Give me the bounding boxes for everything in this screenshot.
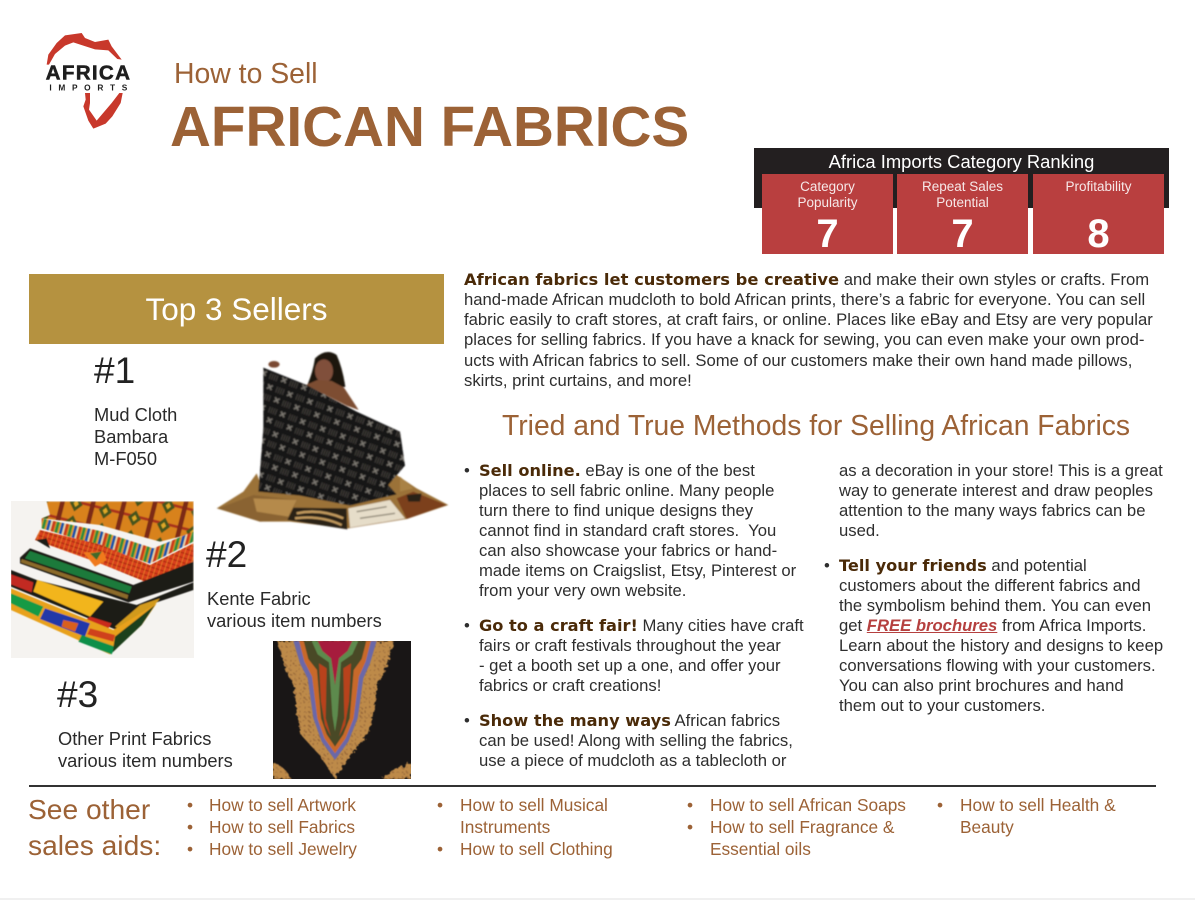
intro paragraph: skirts, print curtains, and more!	[464, 371, 692, 390]
photo: stacked kente fabrics	[11, 501, 194, 658]
tip: tell your friends: Tell your friends and potential	[839, 556, 1087, 575]
link list: column 4	[937, 795, 1116, 837]
rank number 1: #1	[94, 350, 135, 391]
tip: sell online	[464, 461, 796, 600]
link list: column 2: •	[437, 795, 443, 815]
tip: tell your friends: •	[824, 556, 830, 575]
tip continued: decoration: attention to the many ways fabrics can be	[839, 501, 1145, 520]
card: profitability: 8	[1087, 212, 1110, 256]
tip: show the many ways: Show the many ways African fabrics	[479, 711, 780, 730]
tip continued: decoration: used.	[839, 521, 880, 540]
link list: column 2: How to sell Musical	[460, 795, 608, 815]
tip: show the many ways: can be used! Along with selling the fabrics,	[479, 731, 793, 750]
link list: column 3: How to sell Fragrance &	[710, 817, 894, 837]
seller 2 text	[206, 534, 382, 631]
tip: sell online: turn there to find unique designs they	[479, 501, 753, 520]
tip: go to a craft fair: fairs or craft festivals throughout the year	[479, 636, 781, 655]
logo: Africa Imports: AFRICA	[46, 62, 130, 85]
intro paragraph: African fabrics let customers be creative and make their own styles or crafts. From	[464, 270, 1149, 289]
intro paragraph	[464, 270, 1153, 390]
tip: tell your friends: the symbolism behind them. You can even	[839, 596, 1151, 615]
tip continued: decoration: way to generate interest and draw peoples	[839, 481, 1153, 500]
tip: go to a craft fair	[464, 616, 804, 695]
link list: column 2: Instruments	[460, 817, 550, 837]
link list: column 4: Beauty	[960, 817, 1014, 837]
tip: show the many ways	[464, 711, 793, 770]
tip: go to a craft fair: fabrics or craft creations!	[479, 676, 661, 695]
seller 1 details: M-F050	[94, 448, 157, 469]
ranking header band: Africa Imports Category Ranking	[829, 151, 1094, 172]
seller 1 text	[94, 350, 177, 469]
tip: sell online: •	[464, 461, 470, 480]
tip: tell your friends	[824, 556, 1163, 715]
seller 2 details: various item numbers	[207, 610, 382, 631]
link list: column 1: •	[187, 817, 193, 837]
logo: Africa Imports: IMPORTS	[49, 83, 128, 93]
title: African Fabrics: AFRICAN FABRICS	[170, 96, 689, 159]
tip continued: decoration	[839, 461, 1163, 540]
tip: tell your friends: Learn about the history and designs to keep	[839, 636, 1163, 655]
seller 1 details: Mud Cloth	[94, 404, 177, 425]
tip: go to a craft fair: Go to a craft fair! Many cities have craft	[479, 616, 804, 635]
link list: column 1: •	[187, 795, 193, 815]
heading: top 3 sellers	[29, 274, 444, 344]
heading: see other sales aids: sales aids:	[28, 829, 161, 861]
seller 3 details: Other Print Fabrics	[58, 728, 211, 749]
card: category popularity	[762, 174, 893, 254]
tip: sell online: can also showcase your fabrics or hand-	[479, 541, 777, 560]
heading: see other sales aids: See other	[28, 793, 150, 825]
card: category popularity: Category	[800, 179, 855, 194]
link list: column 1: •	[187, 839, 193, 859]
intro paragraph: ucts with African fabrics to sell. Some of our customers make their own hand made pillows,	[464, 351, 1132, 370]
link list: column 3: How to sell African Soaps	[710, 795, 906, 815]
link list: column 4: How to sell Health &	[960, 795, 1116, 815]
tip: go to a craft fair: - get a booth set up a one, and offer your	[479, 656, 781, 675]
link list: column 2: How to sell Clothing	[460, 839, 613, 859]
tip: sell online: places to sell fabric online. Many people	[479, 481, 774, 500]
intro paragraph: places for selling fabrics. If you have a knack for sewing, you can even make your own prod-	[464, 330, 1144, 349]
tip continued: decoration: as a decoration in your store! This is a great	[839, 461, 1163, 480]
seller 1 details	[94, 404, 177, 469]
card: repeat sales potential: Repeat Sales	[922, 179, 1003, 194]
ranking header band	[754, 148, 1169, 208]
link list: column 3	[687, 795, 906, 859]
heading: top 3 sellers: Top 3 Sellers	[145, 291, 328, 327]
link list: column 1: How to sell Fabrics	[209, 817, 355, 837]
link list: column 3: •	[687, 817, 693, 837]
link list: column 1	[187, 795, 357, 859]
tip: show the many ways: use a piece of mudcloth as a tablecloth or	[479, 751, 786, 770]
tip: sell online: from your very own website.	[479, 581, 686, 600]
heading: see other sales aids	[28, 793, 161, 861]
rank number 3: #3	[57, 674, 98, 715]
text column: selling methods right	[824, 461, 1163, 715]
tip: tell your friends: get FREE brochures from Africa Imports.	[839, 616, 1146, 635]
intro paragraph: fabric easily to craft stores, at craft fairs, or online. Places like eBay and Etsy are very popular	[464, 310, 1153, 329]
seller 3 text	[57, 674, 233, 771]
tip: go to a craft fair: •	[464, 616, 470, 635]
seller 2 details	[207, 588, 382, 631]
link list: column 4: •	[937, 795, 943, 815]
card: category popularity: Popularity	[797, 195, 858, 210]
card: repeat sales potential: 7	[951, 212, 974, 256]
seller 3 details	[58, 728, 233, 771]
link list: column 1: How to sell Artwork	[209, 795, 356, 815]
card: category popularity: 7	[816, 212, 839, 256]
tip: show the many ways: •	[464, 711, 470, 730]
photo: woman holding mud cloth	[216, 350, 449, 530]
card: profitability: Profitability	[1065, 179, 1132, 194]
link list: column 2: •	[437, 839, 443, 859]
link list: column 1: How to sell Jewelry	[209, 839, 357, 859]
seller 3 details: various item numbers	[58, 750, 233, 771]
subtitle: How to Sell: How to Sell	[174, 58, 318, 90]
tip: tell your friends: customers about the different fabrics and	[839, 576, 1141, 595]
card: repeat sales potential	[897, 174, 1028, 254]
link list: column 3: •	[687, 795, 693, 815]
link list: column 3: Essential oils	[710, 839, 811, 859]
logo: Africa Imports	[46, 33, 130, 129]
tip: tell your friends: them out to your customers.	[839, 696, 1045, 715]
tip: sell online: Sell online. eBay is one of the best	[479, 461, 755, 480]
heading: tried and true methods: Tried and True Methods for Selling African Fabrics	[502, 409, 1130, 441]
tip: sell online: cannot find in standard craft stores. You	[479, 521, 776, 540]
card: repeat sales potential: Potential	[936, 195, 989, 210]
photo: dashiki print fabric	[273, 641, 411, 779]
tip: sell online: made items on Craigslist, Etsy, Pinterest or	[479, 561, 796, 580]
link list: column 2	[437, 795, 613, 859]
seller 1 details: Bambara	[94, 426, 168, 447]
tip: tell your friends: conversations flowing with your customers.	[839, 656, 1156, 675]
tip: tell your friends: You can also print brochures and hand	[839, 676, 1124, 695]
seller 2 details: Kente Fabric	[207, 588, 311, 609]
rank number 2: #2	[206, 534, 247, 575]
card: profitability	[1033, 174, 1164, 254]
panel: category ranking	[754, 148, 1169, 256]
intro paragraph: hand-made African mudcloth to bold African prints, there’s a fabric for everyone. You can sell	[464, 290, 1145, 309]
text column: selling methods left	[464, 461, 804, 770]
